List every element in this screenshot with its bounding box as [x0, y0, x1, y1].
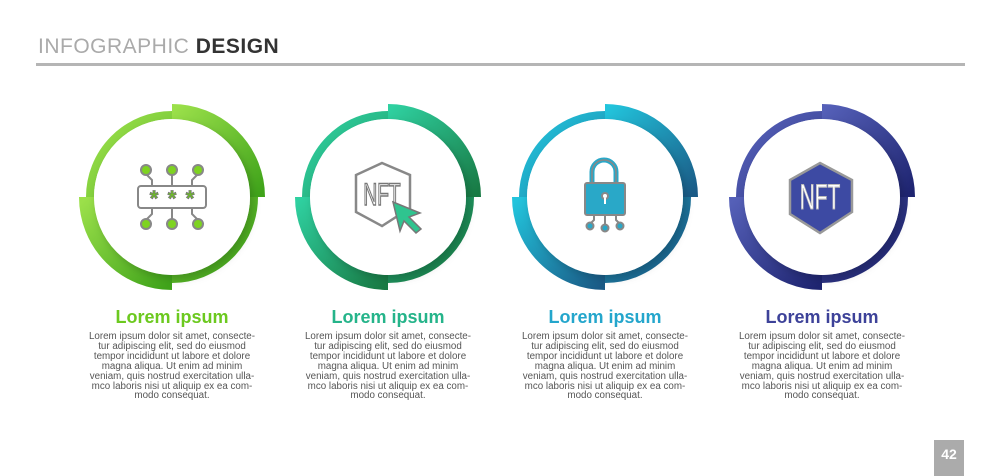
icon: password chip — [138, 165, 206, 229]
icon: password chip: * — [168, 186, 177, 211]
circles graphic — [79, 104, 915, 290]
text block 4: veniam, quis nostrud exercitation ulla- — [740, 371, 904, 382]
circle 4 — [736, 112, 908, 282]
icon: lock network — [585, 160, 625, 232]
text block 3: tur adipiscing elit, sed do eiusmod — [531, 341, 679, 352]
text block 2: Lorem ipsum — [331, 307, 445, 327]
text block 2: tur adipiscing elit, sed do eiusmod — [314, 341, 462, 352]
text block 4: mco laboris nisi ut aliquip ex ea com- — [742, 381, 902, 392]
text block 1: magna aliqua. Ut enim ad minim — [102, 361, 242, 372]
text block 1: mco laboris nisi ut aliquip ex ea com- — [92, 381, 252, 392]
text block 2: Lorem ipsum dolor sit amet, consecte- — [305, 331, 471, 342]
text block 3 — [522, 307, 688, 401]
text block 2 — [305, 307, 471, 401]
icon: NFT hexagon — [790, 163, 852, 233]
page number: 42 — [941, 446, 957, 462]
title: INFOGRAPHIC DESIGN — [38, 35, 279, 58]
icon: password chip: * — [150, 186, 159, 211]
text block 3: Lorem ipsum — [548, 307, 662, 327]
circle 2 — [302, 112, 474, 282]
text block 3: tempor incididunt ut labore et dolore — [527, 351, 683, 362]
text block 3: Lorem ipsum dolor sit amet, consecte- — [522, 331, 688, 342]
text block 2: modo consequat. — [350, 390, 426, 401]
text block 2: veniam, quis nostrud exercitation ulla- — [306, 371, 470, 382]
text block 4: tur adipiscing elit, sed do eiusmod — [748, 341, 896, 352]
icon: NFT hexagon: NFT — [800, 179, 840, 218]
text block 3: modo consequat. — [567, 390, 643, 401]
text block 2: tempor incididunt ut labore et dolore — [310, 351, 466, 362]
text block 2: mco laboris nisi ut aliquip ex ea com- — [308, 381, 468, 392]
icon: NFT cursor: NFT — [363, 179, 401, 212]
icon: NFT cursor — [356, 163, 421, 233]
text block 3: veniam, quis nostrud exercitation ulla- — [523, 371, 687, 382]
circle 1 — [86, 112, 258, 282]
text block 1: tur adipiscing elit, sed do eiusmod — [98, 341, 246, 352]
text block 1: tempor incididunt ut labore et dolore — [94, 351, 250, 362]
text block 1: veniam, quis nostrud exercitation ulla- — [90, 371, 254, 382]
text block 1 — [89, 307, 255, 401]
text block 4: tempor incididunt ut labore et dolore — [744, 351, 900, 362]
text block 3: magna aliqua. Ut enim ad minim — [535, 361, 675, 372]
text block 1: Lorem ipsum — [115, 307, 229, 327]
text block 4: magna aliqua. Ut enim ad minim — [752, 361, 892, 372]
text block 4 — [739, 307, 905, 401]
text block 2: magna aliqua. Ut enim ad minim — [318, 361, 458, 372]
text block 1: modo consequat. — [134, 390, 210, 401]
circle 3 — [520, 112, 690, 282]
text block 4: Lorem ipsum — [765, 307, 879, 327]
icon: password chip: * — [186, 186, 195, 211]
text block 4: Lorem ipsum dolor sit amet, consecte- — [739, 331, 905, 342]
text block 1: Lorem ipsum dolor sit amet, consecte- — [89, 331, 255, 342]
page number — [934, 440, 964, 476]
text block 3: mco laboris nisi ut aliquip ex ea com- — [525, 381, 685, 392]
text block 4: modo consequat. — [784, 390, 860, 401]
